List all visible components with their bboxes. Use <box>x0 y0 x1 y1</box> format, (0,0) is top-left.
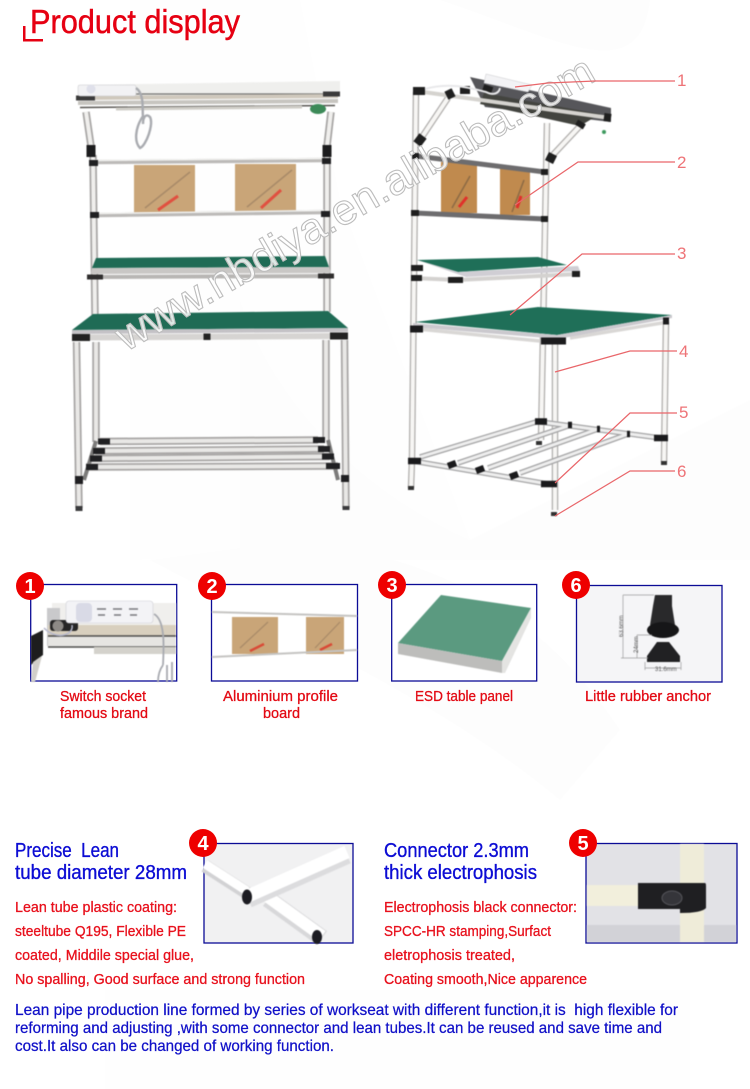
panel 1: switch socket <box>31 584 177 682</box>
callout 5: 5 <box>679 403 688 422</box>
socket photo <box>30 600 177 682</box>
callout 2 <box>515 153 686 205</box>
label: switch socket: famous brand <box>60 705 148 722</box>
frame uprights <box>411 92 666 510</box>
title: Product display: Product display <box>30 3 240 40</box>
text: lean tube description: steeltube Q195, Flexible PE <box>15 923 186 940</box>
badge 1 <box>16 572 44 600</box>
text: connector description: SPCC-HR stamping,Surfact <box>384 923 552 940</box>
white tubes <box>202 846 350 945</box>
heading: connector: Connector 2.3mm <box>384 840 529 862</box>
badge 4: 4 <box>197 833 209 855</box>
label: switch socket: Switch socket <box>60 688 147 705</box>
middle green shelf <box>87 256 334 277</box>
text: bottom paragraph: cost.It also can be changed of working function. <box>15 1038 334 1055</box>
panel 2: aluminium profile board <box>212 584 358 681</box>
rubber anchor photo <box>619 595 681 673</box>
text: bottom paragraph: Lean pipe production line formed by series of workseat with different function,it is high flexible for <box>15 1002 679 1019</box>
right workbench photo <box>408 74 672 516</box>
heading: connector: thick electrophosis <box>384 862 537 884</box>
label: little rubber anchor: Little rubber anchor <box>585 688 711 705</box>
label: aluminium profile board: board <box>263 705 300 722</box>
badge 6 <box>562 571 590 599</box>
badge 3: 3 <box>386 575 398 597</box>
label: aluminium profile board <box>223 688 338 722</box>
panel 4: lean tube photo <box>204 844 353 944</box>
upper frame tubes <box>86 112 331 315</box>
text: lean tube description <box>15 899 305 988</box>
callout 6 <box>555 462 686 516</box>
rubber anchor photo: 63.6mm <box>619 615 625 637</box>
callout 4 <box>555 342 688 372</box>
callout 2: 2 <box>677 153 686 172</box>
callout 1 <box>515 71 686 90</box>
heading: lean tube: Precise Lean <box>15 840 119 862</box>
watermark: www.nbdiya.en.alibaba.com <box>106 47 603 361</box>
lower rack <box>408 422 668 516</box>
aluminium bars and boards <box>411 156 548 219</box>
top shelf panel <box>76 81 340 114</box>
text: lean tube description: Lean tube plastic coating: <box>15 899 177 916</box>
text: lean tube description: coated, Middile special glue, <box>15 947 194 964</box>
text: connector description: Coating smooth,Nice apparence <box>384 971 587 988</box>
main table top <box>410 307 672 341</box>
callout 3: 3 <box>677 244 686 263</box>
rubber anchor photo: 31.6mm <box>655 667 677 673</box>
badge 2 <box>198 572 226 600</box>
text: lean tube description: No spalling, Good surface and strong function <box>15 971 305 988</box>
label: switch socket <box>60 688 148 722</box>
callout 5 <box>555 403 688 483</box>
text: connector description: Electrophosis black connector: <box>384 899 577 916</box>
callout 4: 4 <box>679 342 688 361</box>
power strip on tilted shelf <box>425 74 532 94</box>
text: connector description <box>384 899 587 988</box>
badge 5: 5 <box>577 833 589 855</box>
esd panel photo <box>398 595 531 673</box>
main table top <box>72 311 348 340</box>
text: connector description: eletrophosis treated, <box>384 947 515 964</box>
power strip and cable <box>78 84 151 148</box>
label: aluminium profile board: Aluminium profile <box>223 688 338 705</box>
rubber anchor photo: 24mm <box>634 636 640 653</box>
heading: lean tube <box>15 840 187 884</box>
badge 1: 1 <box>24 576 36 598</box>
board photo <box>212 612 357 657</box>
legs and lower rack <box>76 340 346 511</box>
callout 1: 1 <box>677 71 686 90</box>
badge 2: 2 <box>206 576 218 598</box>
text: bottom paragraph <box>15 1002 679 1055</box>
left workbench photo <box>72 81 348 511</box>
panel 5: connector photo <box>586 844 737 943</box>
callout 6: 6 <box>677 462 686 481</box>
panel 3: ESD table panel <box>392 584 537 681</box>
tilted top shelf <box>413 77 611 162</box>
badge 3 <box>378 571 406 599</box>
aluminium bars and boards <box>89 158 331 215</box>
badge 4 <box>189 829 217 857</box>
heading: lean tube: tube diameter 28mm <box>15 862 187 884</box>
badge 6: 6 <box>570 575 582 597</box>
panel 6: little rubber anchor <box>576 586 722 682</box>
heading: connector <box>384 840 537 884</box>
middle green shelf <box>411 257 580 280</box>
callout 3 <box>510 244 686 315</box>
tube and connector <box>587 844 736 942</box>
badge 5 <box>569 829 597 857</box>
label: ESD table panel: ESD table panel <box>415 688 513 705</box>
text: bottom paragraph: reforming and adjusting ,with some connector and lean tubes.It can be reused and save time and <box>15 1020 662 1037</box>
